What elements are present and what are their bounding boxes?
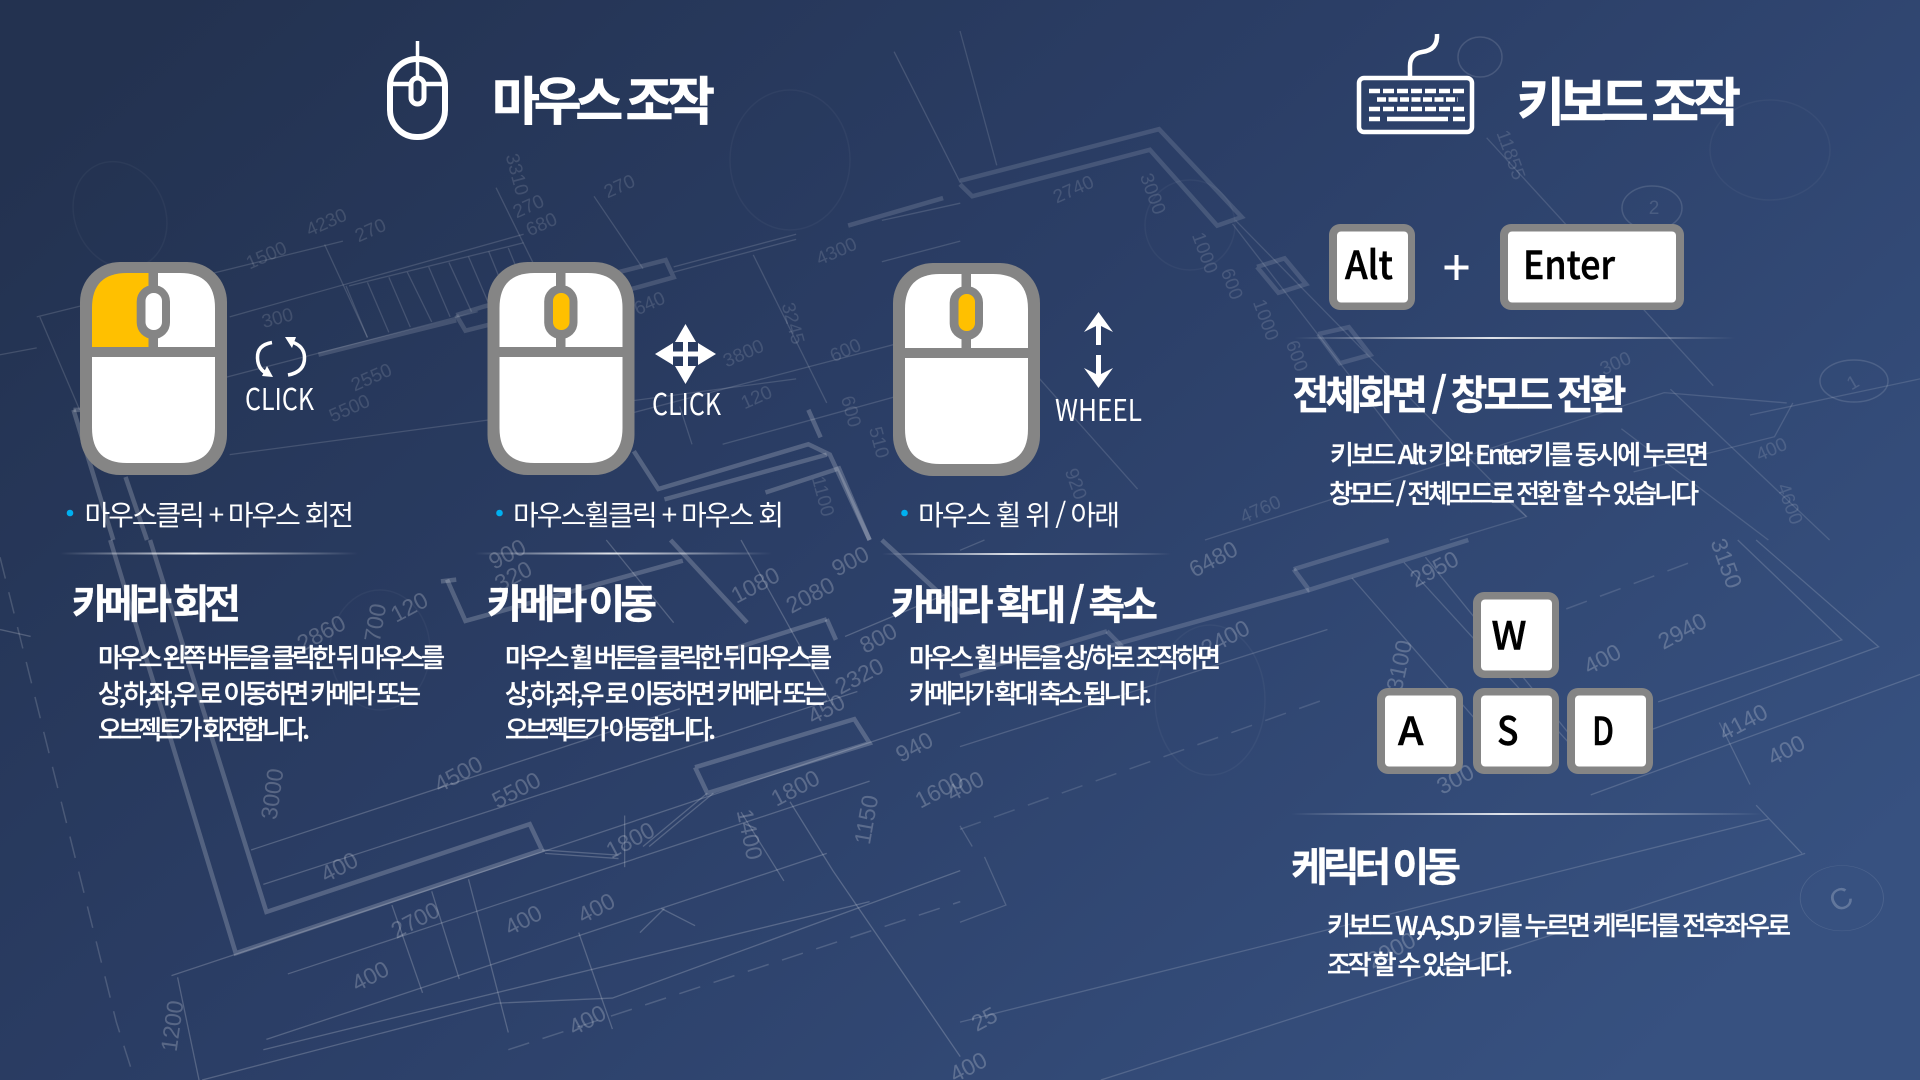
dimension numbers: 270 <box>352 215 390 247</box>
dimension numbers: 3310 <box>501 151 532 198</box>
text: fullscreen description <box>1329 435 1709 511</box>
icon: mouse with wheel highlighted <box>488 262 634 475</box>
dimension numbers: 3800 <box>720 336 767 372</box>
background blueprint drawing: 320 <box>490 555 536 596</box>
text: camera move description: 오브젝트가 이동합니다. <box>505 710 716 747</box>
background blueprint drawing: 1400 <box>732 807 768 862</box>
icon: mouse with left button highlighted <box>80 262 227 475</box>
dimension numbers: 4230 <box>303 205 350 241</box>
text: fullscreen description: 창모드 / 전체모드로 전환 할 수 있습니다 <box>1329 474 1699 511</box>
background blueprint drawing: 1150 <box>849 793 883 846</box>
key: A: A <box>1398 701 1424 757</box>
q1 lower walls <box>73 410 870 540</box>
header: keyboard controls <box>1359 34 1741 136</box>
background blueprint drawing: 2320 <box>831 652 888 699</box>
dimension numbers: 3000 <box>1135 171 1169 218</box>
text: camera rotate description: 상,하,좌,우 로 이동하면 카메라 또는 <box>98 674 421 711</box>
bullet: wheel click + rotate: 마우스휠클릭 + 마우스 회 <box>513 494 784 534</box>
key: A <box>1377 688 1463 774</box>
icon: rotate arrows <box>257 337 305 377</box>
background blueprint drawing: 2700 <box>387 896 444 943</box>
title: keyboard: 키보드 조작 <box>1517 61 1741 136</box>
dimension numbers: 1500 <box>243 238 290 274</box>
q4 <box>960 540 1920 1080</box>
dimension numbers: 4760 <box>1237 492 1284 528</box>
background blueprint drawing: 2400 <box>1197 614 1254 661</box>
background blueprint drawing: 2080 <box>782 571 839 618</box>
background blueprint drawing: C <box>1824 880 1859 919</box>
dimension numbers: 510 <box>864 425 893 461</box>
background blueprint drawing: 2860 <box>293 609 350 656</box>
background blueprint drawing: 400 <box>500 899 546 940</box>
background blueprint drawing: 900 <box>827 540 873 581</box>
divider <box>1291 813 1762 815</box>
dimension numbers: 4600 <box>1772 481 1806 528</box>
background blueprint drawing: 400 <box>347 955 393 996</box>
background blueprint drawing: 25 <box>967 1001 1002 1036</box>
dimension numbers: 1000 <box>1248 297 1282 344</box>
background blueprint drawing: 400 <box>564 999 610 1040</box>
panel: camera rotate <box>60 262 445 747</box>
header: mouse controls <box>390 41 715 137</box>
panel: character movement <box>1291 592 1791 982</box>
key: D <box>1567 688 1653 774</box>
background blueprint drawing: 2900 <box>1363 926 1420 973</box>
heading: camera move: 카메라 이동 <box>487 572 657 630</box>
background blueprint drawing: 1600 <box>911 766 968 813</box>
heading: character movement: 케릭터 이동 <box>1291 835 1461 893</box>
background blueprint drawing: 900 <box>484 533 530 574</box>
icon: up and down arrows <box>1084 312 1113 388</box>
background blueprint drawing: 400 <box>1763 729 1809 770</box>
dimension numbers: 1100 <box>807 474 838 519</box>
dimension numbers: 5500 <box>326 391 373 427</box>
dimension numbers: 600 <box>836 394 865 430</box>
background blueprint drawing: 4140 <box>1715 698 1772 745</box>
q1 <box>0 52 960 455</box>
key: Enter: Enter <box>1523 235 1616 291</box>
plus sign <box>1444 255 1468 280</box>
background blueprint drawing: 120 <box>386 586 432 627</box>
background blueprint drawing: 3100 <box>1381 638 1417 693</box>
dimension numbers: 920 <box>1060 466 1090 503</box>
dimension numbers: 3245 <box>777 300 808 347</box>
key: S: S <box>1497 701 1518 757</box>
background blueprint drawing: 800 <box>855 617 901 658</box>
text: fullscreen description: 키보드 Alt 키와 Enter키를 동시에 누르면 <box>1330 435 1709 472</box>
text: character movement description <box>1327 906 1791 982</box>
text: camera rotate description: 오브젝트가 회전합니다. <box>98 710 310 747</box>
dimension numbers: 600 <box>1281 338 1311 375</box>
icon: keyboard outline <box>1359 34 1472 132</box>
text: camera zoom description <box>909 638 1221 711</box>
background blueprint drawing: 1200 <box>156 999 189 1053</box>
background blueprint drawing: 1080 <box>727 561 784 608</box>
background blueprint drawing: 400 <box>1579 638 1625 679</box>
dimension numbers <box>243 127 1863 528</box>
dimension numbers: 4300 <box>813 234 860 270</box>
divider <box>1294 337 1735 339</box>
panel: camera zoom <box>882 263 1221 711</box>
dimension numbers: 2 <box>1649 198 1659 219</box>
text: camera zoom description: 마우스 휠 버튼을 상/하로 조작하면 <box>909 638 1221 675</box>
heading: camera zoom: 카메라 확대 / 축소 <box>891 573 1158 631</box>
background blueprint drawing: 6480 <box>1185 535 1242 582</box>
dimension numbers: 2550 <box>348 360 395 396</box>
key: D: D <box>1592 701 1614 757</box>
very faint contour shapes <box>56 90 1830 775</box>
faint numbered circles <box>1458 37 1888 402</box>
bullet: mouse click + rotate: 마우스클릭 + 마우스 회전 <box>84 494 354 534</box>
background blueprint drawing: 450 <box>803 688 849 729</box>
q3 <box>0 540 960 1080</box>
dimension numbers: 270 <box>601 171 639 203</box>
text: camera rotate description: 마우스 왼쪽 버튼을 클릭한 뒤 마우스를 <box>98 638 445 675</box>
background blueprint drawing: 2940 <box>1654 607 1711 654</box>
key: Enter <box>1500 224 1684 310</box>
text: camera move description: 상,하,좌,우 로 이동하면 카메라 또는 <box>505 674 827 711</box>
divider <box>475 552 772 554</box>
label: wheel: WHEEL <box>1055 386 1142 430</box>
key: Alt <box>1329 224 1415 310</box>
background blueprint drawing: 3000 <box>256 767 289 821</box>
text: camera move description <box>505 638 832 747</box>
background blueprint drawing: 940 <box>891 726 937 767</box>
icon: mouse outline <box>390 41 445 137</box>
background blueprint drawing: 1800 <box>767 764 824 811</box>
background blueprint drawing: 1800 <box>602 816 659 863</box>
dimension numbers: 600 <box>827 335 865 367</box>
key: W: W <box>1492 606 1526 662</box>
background blueprint drawing: 5500 <box>488 766 545 813</box>
dimension numbers: 640 <box>631 288 669 320</box>
text: character movement description: 키보드 W,A,S,D 키를 누르면 케릭터를 전후좌우로 <box>1327 906 1791 943</box>
heading: fullscreen / window mode: 전체화면 / 창모드 전환 <box>1292 363 1626 421</box>
background blueprint drawing: 400 <box>316 846 362 887</box>
q2 <box>960 31 1920 540</box>
background blueprint drawing: 2950 <box>1406 545 1463 592</box>
background blueprint drawing: 700 <box>359 601 391 644</box>
text: camera zoom description: 카메라가 확대 축소 됩니다. <box>909 674 1152 711</box>
dimension numbers: 11855 <box>1492 127 1529 183</box>
dimension numbers: 270 <box>510 191 548 223</box>
dimension numbers: 120 <box>738 382 776 414</box>
divider <box>882 553 1171 555</box>
panel: fullscreen toggle <box>1292 224 1735 511</box>
key: S <box>1473 688 1559 774</box>
background blueprint drawing: 400 <box>942 765 988 806</box>
background blueprint drawing: 3150 <box>1706 535 1747 592</box>
dimension numbers: 300 <box>1597 348 1635 380</box>
panel: camera move <box>475 262 832 747</box>
key: W <box>1473 592 1559 678</box>
background blueprint drawing: 300 <box>1432 758 1478 799</box>
title: mouse: 마우스 조작 <box>492 60 715 135</box>
key: Alt: Alt <box>1345 235 1393 291</box>
dimension numbers: 300 <box>260 304 296 333</box>
text: character movement description: 조작 할 수 있습니다. <box>1327 945 1513 982</box>
background blueprint drawing: 400 <box>573 887 619 928</box>
heading: camera rotate: 카메라 회전 <box>72 572 241 630</box>
divider <box>60 552 358 554</box>
dimension numbers: 2740 <box>1050 172 1097 208</box>
dimension numbers: 1000 <box>1187 230 1221 277</box>
bullet: wheel up / down: 마우스 휠 위 / 아래 <box>918 494 1120 534</box>
dimension numbers: 400 <box>1753 434 1791 466</box>
icon: mouse with wheel highlighted <box>893 263 1040 476</box>
dimension numbers: 600 <box>1216 266 1246 303</box>
label: click: CLICK <box>245 375 315 419</box>
label: click: CLICK <box>652 380 722 424</box>
icon: four-way move arrow <box>655 324 716 384</box>
dimension numbers: 1 <box>1843 371 1863 395</box>
background blueprint drawing: 4500 <box>430 750 487 797</box>
dimension numbers: 680 <box>523 209 561 241</box>
text: camera move description: 마우스 휠 버튼을 클릭한 뒤 마우스를 <box>505 638 832 675</box>
text: camera rotate description <box>98 638 445 747</box>
